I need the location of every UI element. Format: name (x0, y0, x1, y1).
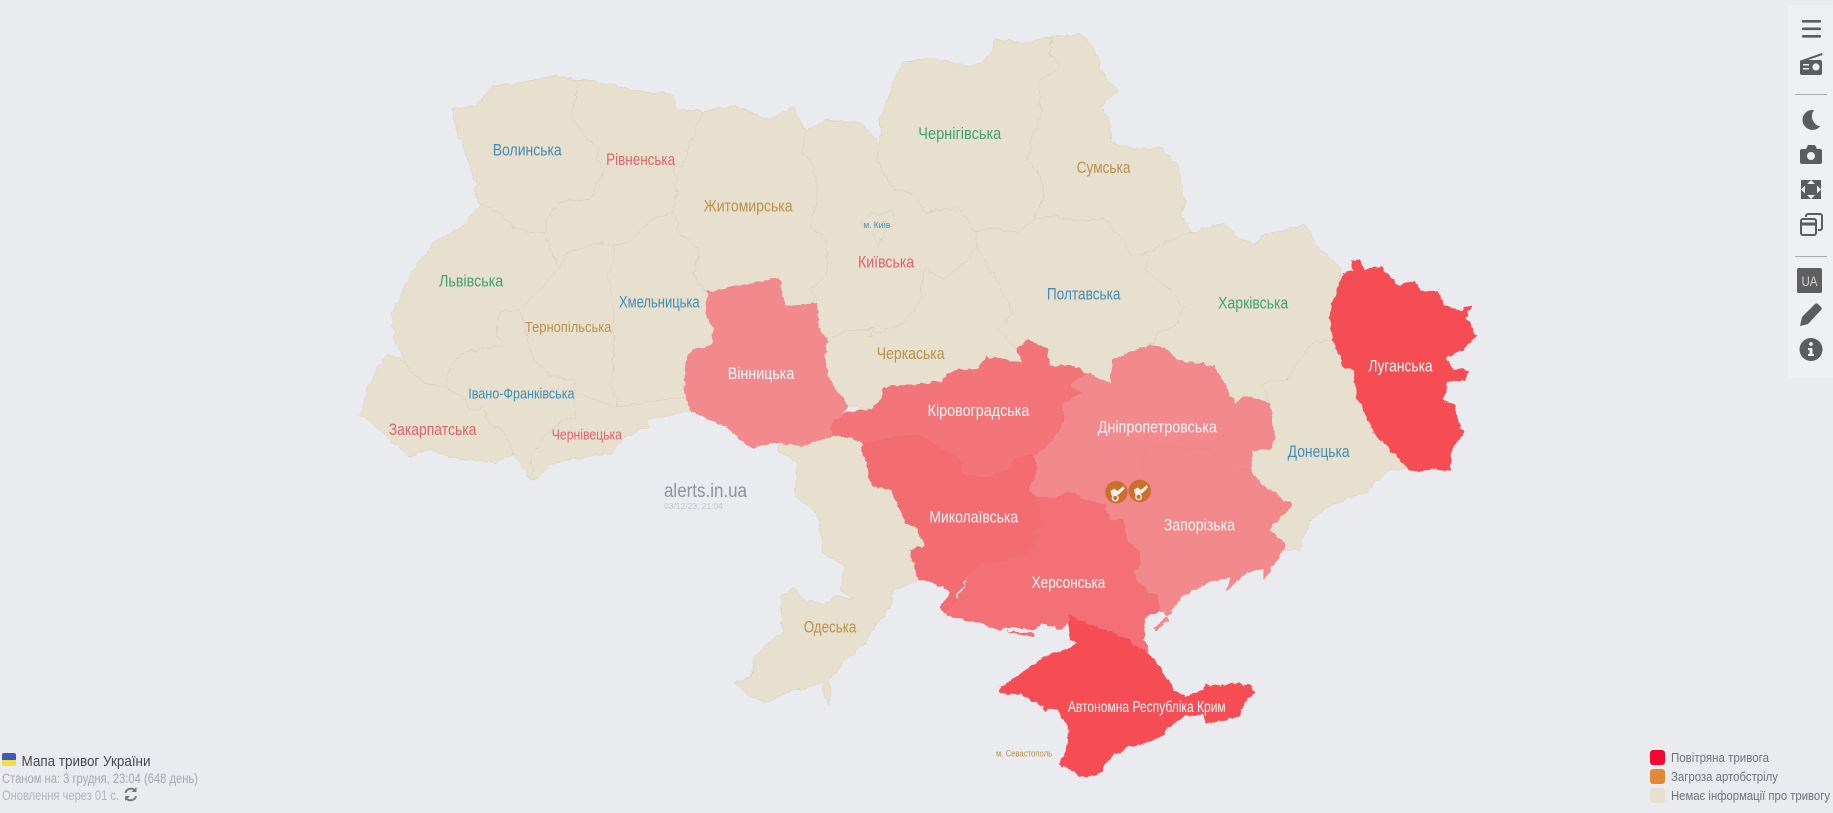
status block (2, 753, 198, 803)
region: Chernivtsi (531, 393, 693, 480)
label: Kyiv oblast: Київська (858, 253, 915, 272)
region: Poltava (976, 216, 1184, 383)
label: Cherkasy: Черкаська (877, 344, 945, 363)
button: language UA: UA (1802, 274, 1818, 289)
region: Kharkiv (1146, 224, 1342, 403)
region: Kyiv oblast (802, 120, 976, 341)
label: Zakarpattia: Закарпатська (389, 420, 477, 439)
label: Crimea: Автономна Республіка Крим (1068, 699, 1226, 716)
heading: Мапа тривог України (22, 753, 150, 770)
region: Sumy (1028, 35, 1192, 256)
map regions (361, 35, 1476, 776)
label: Lviv: Львівська (439, 271, 504, 290)
region: Zakarpattia (361, 355, 513, 463)
label: Kirovohrad: Кіровоградська (928, 401, 1030, 420)
region: Crimea (1001, 616, 1256, 776)
label: Vinnytsia: Вінницька (728, 364, 795, 383)
region: Volyn (452, 76, 604, 233)
label: Sumy: Сумська (1077, 158, 1131, 177)
region: Kirovohrad (831, 340, 1086, 478)
legend (1650, 750, 1831, 803)
region: Dnipropetrovsk (1029, 346, 1274, 526)
button: language UA (1797, 268, 1822, 293)
label: Kyiv city: м. Київ (863, 220, 890, 230)
label: Donetsk: Донецька (1288, 442, 1350, 461)
watermark (664, 481, 747, 511)
label: Khmelnytskyi: Хмельницька (619, 292, 700, 311)
region: Rivne (545, 79, 704, 267)
icon: fullscreen (1801, 180, 1821, 199)
icon: pencil (1800, 303, 1822, 326)
legend: air raid: Повітряна тривога (1671, 751, 1769, 765)
label: Kharkiv: Харківська (1218, 294, 1289, 313)
region: Ivano-Frankivsk (447, 310, 575, 480)
region: Zhytomyr (673, 105, 828, 306)
region: Kherson sliver (1007, 630, 1033, 636)
label: Mykolaiv: Миколаївська (929, 508, 1019, 527)
label: Kherson: Херсонська (1032, 573, 1106, 592)
icon: windows (1801, 214, 1822, 235)
label: Odesa: Одеська (804, 617, 857, 636)
label: Rivne: Рівненська (606, 150, 676, 169)
icon: info (1800, 338, 1822, 361)
icon: Ukrainian flag (2, 753, 16, 766)
label: Ternopil: Тернопільська (525, 319, 612, 336)
icon: shelling threat 1 (1105, 481, 1128, 503)
watermark: alerts.in.ua (664, 481, 747, 502)
region: Arabat spit (1154, 617, 1169, 630)
label: Dnipropetrovsk: Дніпропетровська (1098, 418, 1217, 437)
label: Volyn: Волинська (493, 140, 562, 159)
region: Cherkasy (824, 247, 1023, 409)
icon: menu (1802, 20, 1821, 38)
region labels (389, 124, 1433, 758)
label: Luhansk: Луганська (1368, 357, 1433, 376)
region: Luhansk (1329, 260, 1476, 470)
icon: shelling threat 2 (1129, 480, 1151, 502)
label: Zaporizhzhia: Запорізька (1164, 516, 1236, 535)
icon: refresh (125, 787, 136, 801)
region: Kyiv city (862, 210, 895, 247)
icon: moon (1802, 110, 1820, 130)
label: Zhytomyr: Житомирська (704, 197, 793, 216)
region: Vinnytsia (685, 278, 848, 448)
label: Chernivtsi: Чернівецька (552, 428, 623, 444)
watermark: 03/12/23, 21:04 (664, 502, 724, 511)
region: Chernihiv (877, 36, 1060, 233)
toolbar panel (1788, 5, 1833, 378)
icon: radio (1800, 53, 1822, 75)
region: Kherson (946, 493, 1160, 653)
region: Mykolaiv (862, 435, 1042, 614)
region: Khmelnytskyi (608, 212, 713, 407)
region: Odesa (735, 435, 925, 705)
legend: shelling: Загроза артобстрілу (1671, 770, 1779, 784)
update countdown: Оновлення через 01 с. (2, 788, 119, 803)
divider (1795, 256, 1827, 257)
region: Donetsk (1252, 340, 1409, 551)
region: Lviv (392, 205, 560, 388)
region: Ternopil (520, 243, 618, 407)
divider (1795, 94, 1827, 95)
label: Ivano-Frankivsk: Івано-Франківська (468, 386, 575, 403)
label: Poltava: Полтавська (1047, 284, 1121, 303)
map of Ukraine (361, 35, 1476, 776)
label: Sevastopol: м. Севастополь (996, 748, 1052, 758)
label: Chernihiv: Чернігівська (918, 124, 1002, 143)
status date: Станом на: 3 грудня, 23:04 (648 день) (2, 771, 198, 786)
icon: camera (1800, 145, 1822, 164)
region: Zaporizhzhia (1105, 445, 1292, 616)
